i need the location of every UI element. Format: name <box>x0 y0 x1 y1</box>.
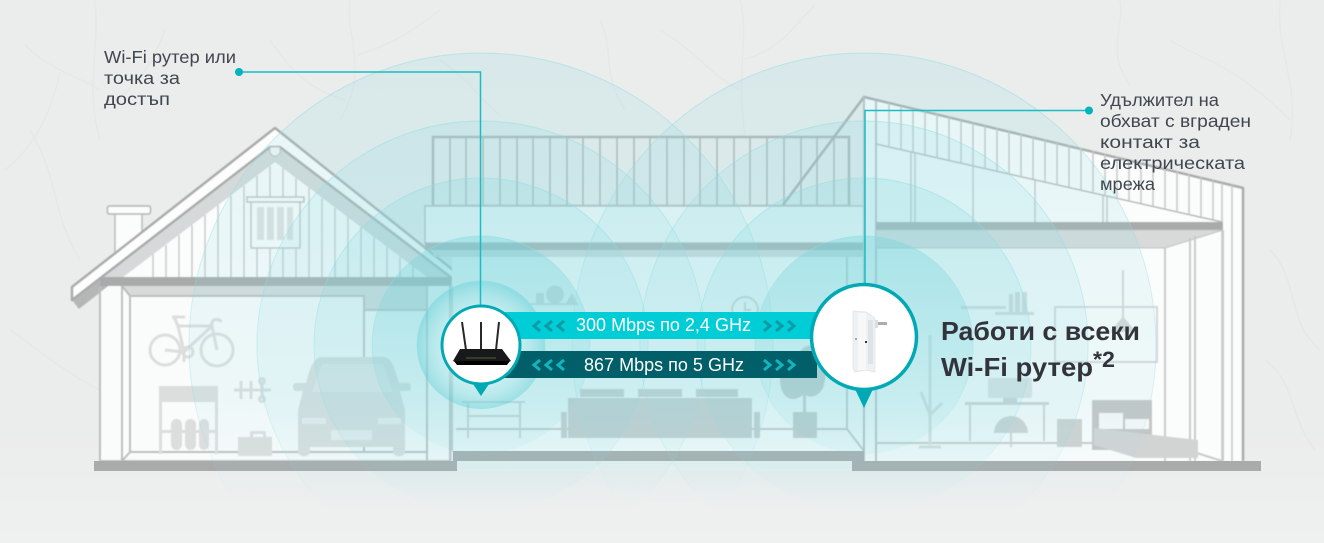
sofa <box>561 389 760 438</box>
heading: Wi-Fi рутер <box>941 352 1093 382</box>
heading: *2 <box>1093 347 1115 372</box>
picture frame with lamp <box>1055 270 1157 362</box>
floor slabs <box>94 451 1261 471</box>
chevrons right <box>764 360 794 370</box>
label: router <box>104 47 236 109</box>
bicycle <box>150 317 233 366</box>
storage rack <box>159 386 218 454</box>
mullions <box>911 152 1107 222</box>
chevrons right <box>764 321 794 331</box>
router badge <box>442 306 520 396</box>
speed label: 867 Mbps по 5 GHz <box>584 355 744 375</box>
coat rack <box>919 335 942 447</box>
roof soffit <box>100 147 452 278</box>
house fill <box>100 286 450 461</box>
speed label: 300 Mbps по 2,4 GHz <box>576 315 751 335</box>
label: extender <box>1100 90 1251 194</box>
gable <box>123 162 427 277</box>
extender badge <box>812 284 916 408</box>
walls <box>100 286 450 461</box>
heading <box>941 316 1140 382</box>
ceiling <box>123 286 427 310</box>
roof <box>72 128 478 300</box>
desk <box>965 378 1049 447</box>
toolbox <box>238 431 272 456</box>
label: extender: контакт за <box>1100 132 1200 152</box>
bed <box>1092 400 1198 458</box>
beam <box>425 243 865 250</box>
right house <box>783 97 1243 461</box>
icon: range extender <box>853 311 887 372</box>
label: extender: мрежа <box>1100 174 1155 194</box>
soffit <box>876 230 1223 248</box>
gable window <box>247 197 304 248</box>
chevrons left <box>534 321 564 331</box>
speed bar: 5 GHz <box>503 351 817 378</box>
roof inner line <box>876 144 1222 222</box>
beam <box>876 222 1223 230</box>
balcony slab <box>425 206 865 243</box>
clock <box>732 297 758 323</box>
wall tools <box>234 378 271 402</box>
middle house section <box>425 137 865 451</box>
label: router: точка за <box>104 68 180 88</box>
label: extender: електрическата <box>1100 153 1245 173</box>
roof slats <box>889 103 1232 461</box>
upper railing <box>433 137 849 206</box>
label: router: достъп <box>104 89 170 109</box>
icon: router <box>453 322 511 365</box>
chevrons left <box>534 360 564 370</box>
wall beam <box>100 277 452 286</box>
leader line: extender <box>865 106 1093 284</box>
leader line: router <box>235 68 480 306</box>
diagonal roof <box>783 97 1243 461</box>
left house: garage <box>72 128 478 461</box>
heading: Работи с всеки <box>941 316 1140 346</box>
walls <box>876 230 1223 461</box>
roof underside shadow <box>72 278 112 309</box>
label: router: Wi-Fi рутер или <box>104 47 236 67</box>
roof finial <box>270 147 280 156</box>
nightstand <box>1057 419 1082 447</box>
label: extender: обхват с вграден <box>1100 111 1251 131</box>
speed bar: 2.4 GHz <box>505 312 817 339</box>
gable slats <box>153 166 413 277</box>
chimney <box>108 206 150 253</box>
car <box>293 357 411 456</box>
plant <box>780 345 826 438</box>
wifi waves: extender <box>572 53 1156 543</box>
room back <box>452 257 864 451</box>
wall shelf and books <box>961 292 1034 315</box>
side table <box>462 401 525 438</box>
left walls <box>864 97 876 461</box>
label: extender: Удължител на <box>1100 90 1219 110</box>
room lines <box>452 257 864 451</box>
shelf with vases <box>530 286 578 305</box>
wifi waves: router <box>189 53 773 543</box>
room fill <box>864 97 1243 461</box>
